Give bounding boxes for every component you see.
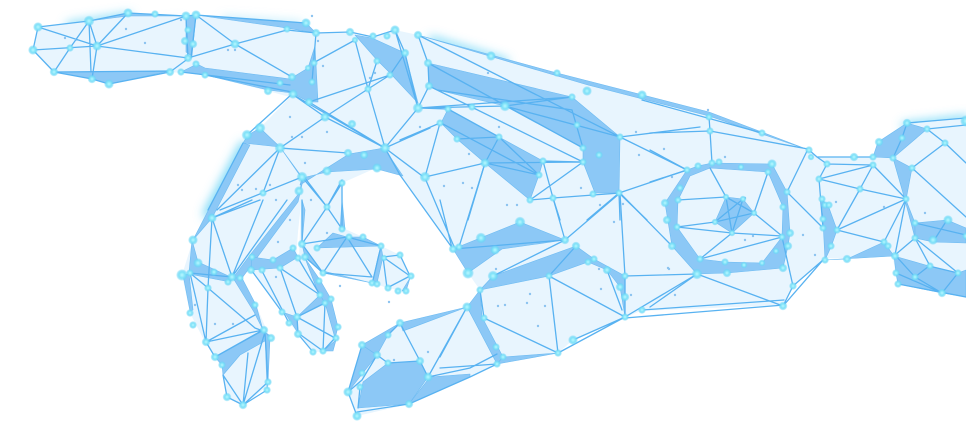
facets: curled middle fingers [251, 200, 410, 351]
wires: eye and forearm [625, 100, 823, 318]
finger gap [296, 204, 301, 258]
nodes: index finger [28, 8, 320, 106]
wires: index finger [33, 13, 316, 92]
facets: index finger [55, 13, 418, 103]
wires: wrist and arm [809, 118, 966, 297]
wires: back of hand [385, 35, 700, 220]
facets: eye-shaped ring [665, 163, 790, 274]
wires: thumb [348, 307, 497, 416]
facets: thumb [348, 307, 470, 408]
nodes: knuckles [242, 25, 434, 211]
wires: palm [400, 163, 784, 368]
nodes: thumb [343, 267, 646, 421]
nodes: fingers [176, 213, 415, 410]
edge glow [70, 17, 966, 214]
facets: palm and wrist crease [453, 222, 625, 364]
nodes: back of hand and palm [436, 51, 647, 302]
wires: ring and little fingers [190, 143, 302, 405]
facets: ring and little fingers [183, 128, 303, 390]
wires: curled fingers [252, 177, 410, 352]
facets: back of hand [300, 35, 809, 200]
nodes: eye ring [660, 113, 797, 310]
facets: arm [822, 123, 966, 297]
nodes: wrist and arm [805, 115, 966, 298]
scattered particles [64, 15, 926, 361]
wires: knuckles [247, 30, 430, 153]
